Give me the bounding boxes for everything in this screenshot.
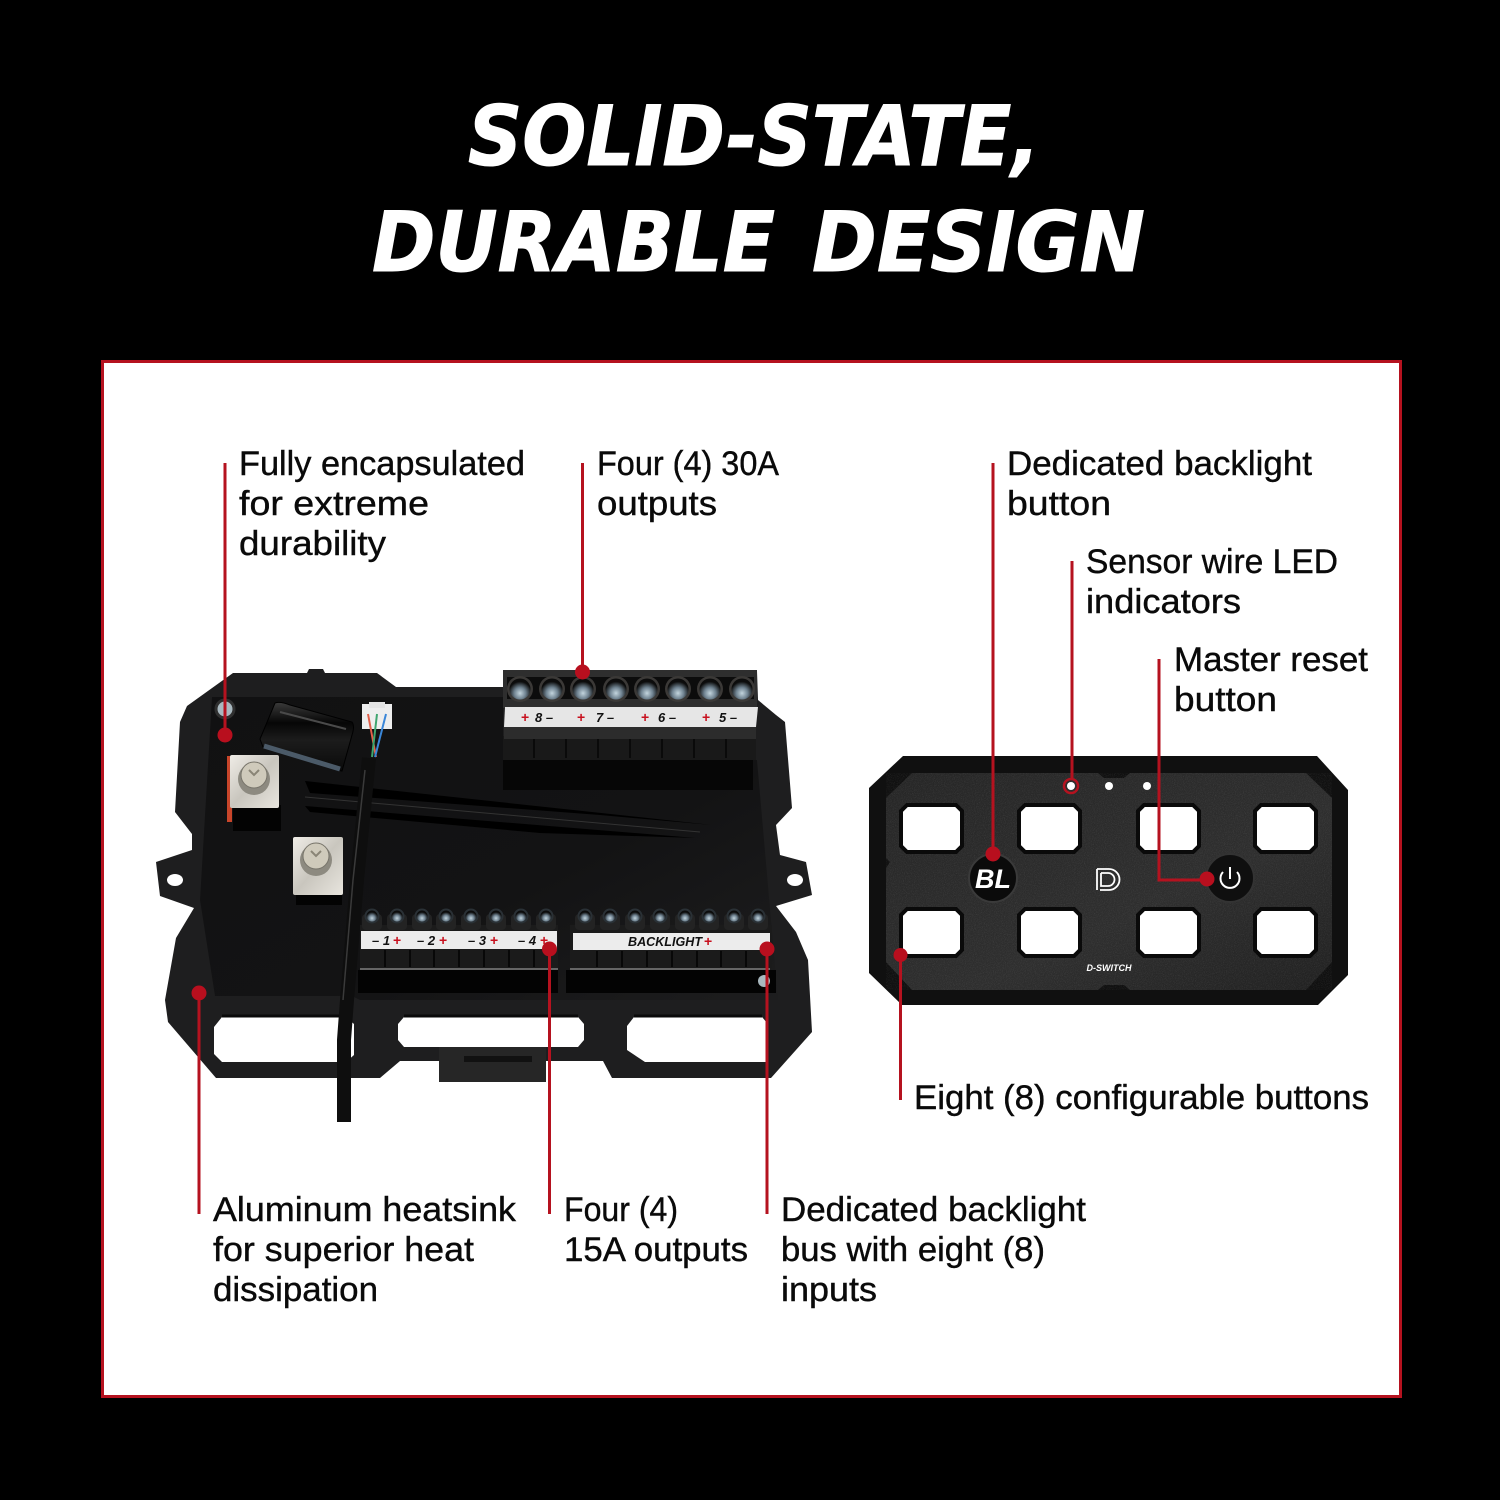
title	[372, 88, 1145, 291]
terminal block: 30A outputs: +	[521, 709, 529, 725]
callout: encapsulated	[218, 445, 525, 742]
capacitor	[260, 702, 354, 771]
callout: heatsink: dissipation	[213, 1271, 378, 1309]
terminal block: 30A outputs: 6 –	[658, 710, 676, 725]
backlight button	[969, 854, 1017, 902]
callout: 30A outputs: Four (4) 30A	[597, 445, 779, 483]
callout: heatsink	[192, 986, 517, 1309]
callout: sensor LEDs: Sensor wire LED	[1086, 543, 1338, 581]
master reset button	[1206, 854, 1254, 902]
mounting ear holes	[167, 874, 183, 886]
terminal block: 15A outputs: – 2	[417, 933, 436, 948]
title: DURABLE	[372, 194, 775, 291]
board housing	[156, 669, 812, 1082]
callout: backlight bus: bus with eight (8)	[781, 1231, 1045, 1269]
callout: 15A outputs	[542, 942, 748, 1269]
sensor cable	[343, 702, 392, 1122]
terminal block: backlight bus: +	[704, 933, 712, 949]
terminal block: 30A outputs: 7 –	[596, 710, 614, 725]
callout: backlight button: button	[1007, 485, 1111, 523]
callout: backlight bus	[760, 942, 1087, 1309]
sensor LEDs	[1067, 782, 1151, 790]
callout: backlight bus: Dedicated backlight	[781, 1191, 1087, 1229]
face grain	[886, 773, 1332, 990]
resin grooves	[305, 781, 712, 825]
terminal block: 30A outputs: +	[702, 709, 710, 725]
terminal block: 15A outputs: +	[393, 932, 401, 948]
backlight button: BL	[975, 864, 1011, 894]
callout: 15A outputs: 15A outputs	[564, 1231, 748, 1269]
callout: master reset: Master reset	[1174, 641, 1369, 679]
callout: configurable buttons: Eight (8) configurable buttons	[914, 1079, 1369, 1117]
corner screw	[216, 700, 234, 718]
terminal block: 15A outputs: +	[439, 932, 447, 948]
photo: D-Switch control panel	[869, 756, 1348, 1005]
brand mark: D-SWITCH	[1086, 963, 1132, 973]
callout: backlight bus: inputs	[781, 1271, 877, 1309]
callout: sensor LEDs: indicators	[1086, 583, 1241, 621]
callout: backlight button: Dedicated backlight	[1007, 445, 1313, 483]
callout: 15A outputs: Four (4)	[564, 1191, 678, 1229]
terminal block: 30A outputs: +	[577, 709, 585, 725]
terminal block: 30A outputs: +	[641, 709, 649, 725]
callout: 30A outputs: outputs	[597, 485, 717, 523]
terminal block: 30A outputs	[503, 670, 758, 760]
terminal block: 30A outputs: 8 –	[535, 710, 553, 725]
callout: 30A outputs	[575, 445, 779, 680]
terminal block: 15A outputs: – 4	[518, 933, 537, 948]
D logo	[1097, 869, 1120, 890]
callout: encapsulated: Fully encapsulated	[239, 445, 525, 483]
panel: white diagram card	[102, 362, 1400, 1396]
potted encapsulation surface	[200, 697, 778, 1000]
terminal block: backlight bus: BACKLIGHT	[628, 934, 703, 949]
terminal block: 15A outputs: +	[490, 932, 498, 948]
callout: master reset	[1159, 641, 1369, 886]
terminal block: 15A outputs: – 1	[372, 933, 390, 948]
terminal block: 15A outputs: +	[540, 932, 548, 948]
textured face	[886, 773, 1332, 990]
title: DESIGN	[812, 194, 1145, 291]
callout: backlight button	[986, 445, 1313, 862]
title: SOLID-STATE,	[468, 88, 1040, 185]
terminal block: 15A outputs: – 3	[468, 933, 487, 948]
callout: sensor LEDs	[1064, 543, 1338, 793]
callout: configurable buttons	[894, 948, 1369, 1117]
terminal block: 15A outputs	[358, 908, 558, 993]
clip tab	[439, 1047, 546, 1082]
button openings	[901, 805, 1316, 956]
power stud 2	[293, 837, 343, 905]
shadow under top terminal block	[503, 756, 753, 790]
callout: heatsink: for superior heat	[213, 1231, 475, 1269]
hole inner lips	[222, 1014, 762, 1018]
panel body	[869, 756, 1348, 1005]
photo: control module board	[156, 669, 812, 1122]
terminal block: backlight bus	[566, 908, 776, 993]
terminal block: 30A outputs: 5 –	[719, 710, 737, 725]
callout: heatsink: Aluminum heatsink	[213, 1191, 517, 1229]
callout: master reset: button	[1174, 681, 1277, 719]
callout: encapsulated: durability	[239, 525, 386, 563]
callout: encapsulated: for extreme	[239, 485, 429, 523]
power stud 1	[227, 755, 281, 831]
